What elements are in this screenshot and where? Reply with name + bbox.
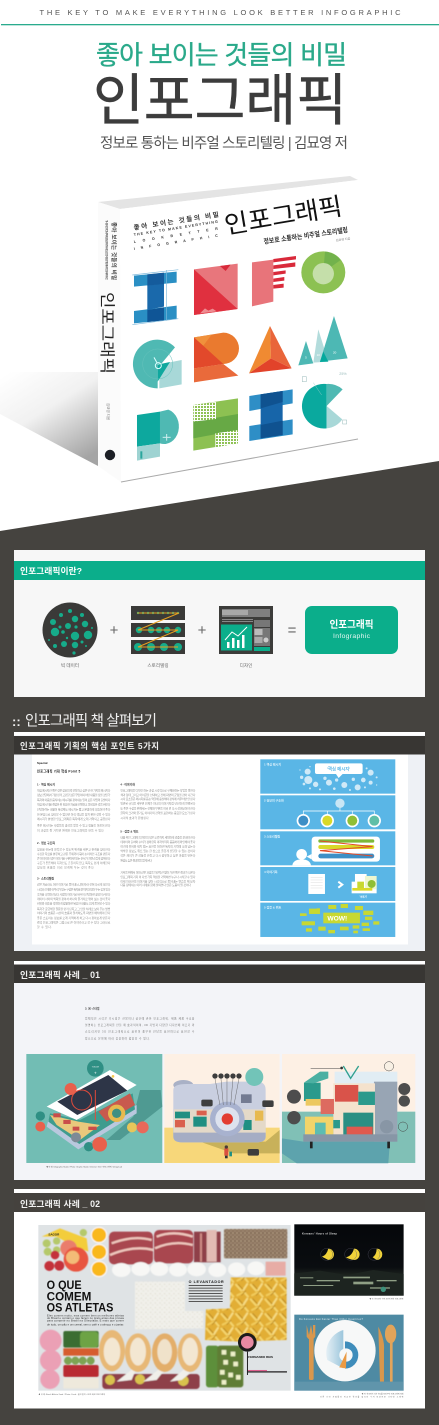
body text columns: 글자의 크기와 굵기도 이야기의 강약을 표현하는 중요한 요소가 된다	[120, 811, 196, 815]
cover text: I N F O G R A P H I C	[134, 234, 218, 251]
label: design: 디자인	[240, 662, 252, 669]
result box: Infographic	[333, 633, 371, 640]
body text columns: 숫자를 나열하기보다 사람의 이야기로 바꾸어 전달하면 공감이 커진다	[37, 893, 111, 897]
body text columns: 데이터 사이의 맥락을 찾아서 하나의 줄거리로 엮어 보는 것이 좋다	[37, 897, 111, 901]
food intro text: do Brasil e contam o que fazem no prato antes das provas	[47, 1316, 125, 1320]
result box: 인포그래픽	[330, 618, 374, 631]
mountains: 20	[333, 350, 337, 354]
main title: 인포그래픽	[93, 69, 347, 132]
image: camera	[164, 1054, 280, 1163]
body text columns: 내용 확인 그래픽 디자인의 작은 오류까지 세밀하게 검증을 끝내야 한다	[120, 835, 196, 839]
cover text: 인포그래픽	[222, 193, 344, 240]
step 3: 3 스토리텔링	[264, 833, 280, 838]
letter F	[252, 256, 296, 306]
body text columns: 정보의 흐름을 미리 설계해 두는 것이 좋다	[37, 865, 94, 869]
step 5: WOW!	[327, 916, 347, 923]
eggs	[112, 1261, 265, 1277]
step 1	[260, 759, 395, 794]
cover text: 좋아 보이는 것들의 비밀	[133, 210, 219, 232]
panel: five key points	[14, 732, 425, 951]
book page	[32, 754, 408, 944]
spine text	[98, 220, 118, 421]
meat	[109, 1230, 221, 1264]
panel band	[14, 736, 425, 754]
panel heading: 인포그래픽 사례 _ 02	[20, 1198, 100, 1209]
body text columns: 완성도 높은 결과물을 얻게 된다	[120, 859, 152, 863]
ham	[266, 1262, 286, 1276]
mountains: 5	[305, 356, 307, 360]
step 2	[260, 795, 395, 829]
book cover	[120, 180, 358, 482]
food intro text	[47, 1313, 125, 1326]
dark background	[0, 461, 439, 1425]
rice	[135, 1282, 203, 1329]
fruit label: SAGOR	[48, 1232, 60, 1236]
body text columns: 정보 전달에서 가장 먼저 고민할 것은 무엇이며 어떤 내용을 담을 것인가	[37, 793, 111, 797]
step 4: '이야기'	[360, 895, 368, 899]
letter C pie	[302, 372, 347, 428]
letter I blue	[249, 389, 293, 441]
icon: storytelling	[131, 606, 185, 654]
page body text: 있으므로 분야에 따라 응용하여 활용할 수 있다.	[85, 1036, 150, 1040]
body text columns: 인포그래픽 기획 핵심 Point 5	[37, 769, 81, 774]
author line: 정보로 통하는 비주얼 스토리텔링 | 김묘영 저	[100, 135, 348, 152]
body text columns: 2 · 정보 구조화	[37, 841, 55, 845]
step 1: 1 핵심 메시지	[264, 761, 281, 766]
top green rule	[1, 24, 439, 25]
book spine	[98, 202, 121, 482]
body text columns: 작은 재미가 큰 감동을 만들고 다시 공유하고 싶은 마음을 만든다	[120, 853, 196, 857]
label: storytelling: 스토리텔링	[147, 662, 169, 669]
grains	[224, 1229, 287, 1258]
page body text	[85, 1007, 195, 1040]
page body text: 스토리지인 3D 인포그래픽으로 표현이 풍부한 전달을 표현하므로 표현할 수	[85, 1030, 195, 1034]
body text columns: 비유와 대조를 적절하게 활용하면 복잡한 내용도 쉽게 풀어낼 수 있다	[37, 902, 111, 906]
body text columns: 또 좋은 구성을 위해서는 전체와 부분을 여러 번 다시 살펴보아야 한다	[120, 807, 196, 811]
athlete badge	[238, 1333, 287, 1375]
step 1: '핵심 메시지'	[327, 766, 350, 773]
top tagline: THE KEY TO MAKE EVERYTHING LOOK BETTER INFOGRAPHIC	[40, 8, 401, 17]
body text columns: 독자가 궁금해할 질문을 먼저 던지고 그 답을 차례로 보여 주는 방법	[37, 907, 111, 911]
infographic: five key steps	[260, 759, 395, 937]
food headline	[47, 1279, 114, 1315]
body text columns: 독자의 마음을 움직이는 메시지를 찾아내는 일이 모든 작업의 출발이다	[37, 798, 111, 802]
pasta	[205, 1277, 287, 1342]
body text columns: 인포그래픽 기획 이 다섯 가지 핵심을 기억하면 누구나 시작할 수 있다	[120, 875, 196, 879]
result box	[305, 606, 398, 654]
step 2: 2 정보의 구조화	[264, 797, 284, 802]
spine text: 좋아 보이는 것들의 비밀	[110, 222, 118, 280]
book top face	[98, 176, 358, 209]
salad	[63, 1331, 99, 1388]
step 4	[260, 867, 395, 901]
panel: what is infographic	[14, 550, 425, 697]
step 3	[260, 831, 395, 865]
spine text: 김묘영 지음	[106, 403, 111, 421]
body text columns: 할 수 있다.	[37, 925, 52, 929]
body text columns: 시각 요소들은 메시지를 돕는 역할에 충실해야 장식에 치우치면 안 된다	[120, 797, 196, 801]
athlete badge: FERNANDO REIS	[248, 1355, 273, 1359]
image: sleep chart: Koreans' Hours of Sleep	[302, 1232, 337, 1236]
body text columns: 전달하려는 내용이 복잡해도 메시지는 짧고 분명하게 다듬어야 좋다	[37, 807, 111, 811]
body text columns: 이제 자신만의 이야기를 찾아 시각적으로 풀어내는 연습을 해 보자	[120, 879, 196, 883]
green beans and cheese	[206, 1346, 243, 1387]
section heading: 인포그래픽 책 살펴보기	[25, 712, 157, 730]
image: athlete food layout	[38, 1225, 291, 1391]
body text columns: 메시지가 분명한 인포그래픽은 독자에게 오래 기억되고 공유된다	[37, 817, 111, 821]
panel heading: 인포그래픽 기획의 핵심 포인트 5가지	[20, 741, 159, 751]
cover letters rows 2 and 3	[133, 326, 347, 461]
body text columns: Special	[37, 761, 48, 765]
plus sign: +	[110, 622, 119, 639]
cover text: 정보로 소통하는 비주얼 스토리텔링	[263, 225, 348, 246]
image: plate chart	[294, 1315, 404, 1391]
body text columns: 여기에 유머와 재치 있는 표현을 더하면 독자의 기억에 오래 남는다	[120, 844, 196, 848]
body text columns: 큰 이야기와 작은 이야기를 구분하면 읽는 순서가 자연스럽게 정해진다	[37, 857, 111, 861]
triangle A	[249, 326, 292, 373]
cover text: L O O K B E T T E R	[134, 227, 218, 244]
lifter column: O LEVANTADOR	[189, 1280, 224, 1284]
cover text	[133, 193, 351, 251]
body text columns: 딱딱한 정보도 위트 있는 한 컷으로 즐겁게 전달할 수 있는 것이다	[120, 849, 196, 853]
letter O	[301, 251, 345, 293]
image: phone: +	[94, 1071, 97, 1076]
image caption: ◀ 위 예: Infographic Studio / Photo: Graphic Studio / Director: Kim / 인포그래픽 / DesignLab	[46, 1165, 123, 1169]
equals sign: =	[288, 622, 297, 639]
body text columns: 4 · 이야기화	[120, 783, 135, 787]
body text columns: 같은 자료라도 어떤 이야기로 풀어내느냐에 따라 전혀 다르게 보인다	[37, 883, 111, 887]
body text columns: 좋은 메시지는 사람들의 공감을 얻을 수 있고 행동을 이끌어 낸다	[37, 824, 111, 828]
lifter column	[189, 1280, 224, 1302]
step 4: 4 이야기화	[264, 869, 278, 874]
body text columns: 좋은 스토리는 정보를 오래 기억하게 하고 다시 찾아보게 만든다	[37, 916, 111, 920]
image: plate chart: Do Koreans Eat Faster Than Other Countries?	[299, 1318, 364, 1321]
step 5: 5 검증 & 위트	[264, 905, 282, 910]
food headline: OS ATLETAS	[47, 1302, 114, 1315]
spine text: THE KEY TO MAKE EVERYTHING LOOK BETTER INFOGRAPHIC	[104, 220, 108, 280]
panel heading: 인포그래픽이란?	[20, 565, 82, 576]
food intro text: Eles comem muito, mas comem bem os melhores atletas	[47, 1313, 125, 1317]
page body text: 3. 3D 스타일	[85, 1007, 100, 1011]
plate caption	[320, 1392, 404, 1398]
panel: example 02	[14, 1189, 425, 1408]
body text columns: 결국 인포그래픽은 그림으로 쓴 이야기라고 할 수 있다 그러므로	[37, 920, 111, 924]
body text columns: 시각적 효과가 완성된다	[120, 816, 149, 820]
letter H	[193, 398, 238, 451]
publisher logo	[105, 450, 115, 460]
food caption: ◀ 위 예: Brazil Athlete Food / Photo: Fuad - 월간 잡지 스포츠 화보 인포그래픽	[38, 1392, 105, 1396]
orange juice	[91, 1227, 107, 1277]
cover text: THE KEY TO MAKE EVERYTHING	[134, 220, 218, 237]
body text columns: 이 과정을 잘 거치면 완벽한 인포그래픽을 만들 수 있다	[37, 829, 104, 833]
food headline: COMEM	[47, 1290, 91, 1303]
green subtitle: 좋아 보이는 것들의 비밀	[96, 40, 347, 70]
panel header band	[14, 561, 425, 580]
label: big data: 빅 데이터	[61, 662, 79, 669]
fruit	[42, 1228, 88, 1272]
body text columns: 핵심 메시지란 좋은 것은 정보의 핵 전달하고 싶은 단 한 가지의 메시지다	[37, 788, 111, 792]
body text columns: 수집한 자료를 분류하고 같은 주제끼리 묶어 논리적인 구조를 만든다	[37, 852, 111, 856]
letter R	[194, 333, 239, 382]
cover text: 김묘영 지음	[335, 235, 351, 242]
page body text: 설명하는 인포그래픽을 만들 때 효과적이며, 3D 기법과 다양한 디자인에 이르기 까	[85, 1023, 195, 1027]
plate caption: ◀ 위: 한국인의 식사 속도를 보여 주는 인포그래픽 사례	[362, 1392, 404, 1396]
panel band	[14, 1193, 425, 1212]
body text columns: 일관된 규칙을 세우면 전체가 하나의 이야기처럼 단단하게 연결된다	[120, 802, 196, 806]
book bottom edge	[121, 439, 358, 482]
panel: example 01	[14, 961, 425, 1180]
letter I	[132, 270, 178, 325]
body text columns: 1 · 핵심 메시지	[37, 783, 55, 787]
image: phone: TOUCH	[92, 1067, 99, 1069]
image: phone	[26, 1054, 162, 1163]
mountains: 10	[317, 353, 320, 357]
letter C pie: 25%	[339, 372, 347, 376]
image: television	[282, 1054, 415, 1163]
mountains	[298, 316, 348, 365]
bread rolls	[99, 1330, 202, 1372]
body text columns: 데이터의 출처와 수치가 정확한지 마지막까지 꼼꼼하게 확인해야 좋다	[120, 840, 196, 844]
body text columns: 핵심 메시지를 결정한 뒤 필요한 자료를 선별하고 불필요한 것을 버린다	[37, 803, 111, 807]
body text columns: 한 문장으로 정리할 수 없다면 아직 핵심을 찾지 못한 것일 수 있다	[37, 812, 111, 816]
body text columns: 시작과 전개와 마무리가 있는 구성은 독자를 끝까지 붙잡아 두는 힘이 있다	[37, 888, 111, 892]
letter G	[133, 340, 182, 388]
plate caption: 다른 나라 사람들과 비교한 결과를 접시와 수저 모양으로 나타낸 그래픽	[320, 1394, 404, 1398]
spine text: 인포그래픽	[98, 292, 116, 374]
body text columns	[37, 761, 196, 929]
icon: big data	[42, 602, 98, 658]
panel heading: 인포그래픽 사례 _ 01	[20, 969, 100, 980]
body text columns: 정보를 한눈에 파악할 수 있도록 위계를 세우고 관계를 정리한다	[37, 848, 111, 852]
page body text: 입체적인 시각은 가시성은 건물이나 공간에 관한 인포그래픽, 제품 제품 구조를	[85, 1016, 195, 1020]
body text columns: 이야기의 흐름은 시선의 흐름과 일치하도록 화면을 배치해야 한다	[37, 911, 111, 915]
food intro text: de tudo, um pão e um cereal, sem o café e o almoço e o jantar.	[47, 1322, 124, 1326]
food headline: O QUE	[47, 1279, 82, 1292]
body text columns: 구조가 튼튼해야 디자인도 흔들리지 않고 독자도 쉽게 이해한다	[37, 861, 111, 865]
image: sleep chart	[294, 1224, 404, 1296]
cover letters row 1	[132, 251, 348, 365]
icon: design	[219, 606, 273, 654]
body text columns: 기획을 위해서 이와 같은 과정을 차근차근 밟아 가면 좋은 결과가 나온다	[120, 870, 196, 874]
plus sign: +	[198, 622, 207, 639]
sleep caption: ◀ 위: 한국인의 수면 시간에 관한 인포그래픽	[369, 1296, 404, 1300]
body text columns: 다음 장에서는 여러 사례를 함께 살펴본다 많은 도움이 될 것이다	[120, 883, 191, 887]
body text columns: 5 · 검증 & 위트	[120, 830, 139, 834]
sandwich slices	[102, 1368, 200, 1389]
book	[98, 176, 358, 482]
step 5	[260, 903, 395, 937]
panel band	[14, 964, 425, 983]
food intro text: para competir no Brasil na Olimpíada. E mais que comer	[47, 1319, 124, 1323]
body text columns: 인포그래픽을 디자인 하는 과정 시각적으로 구체화하는 작업을 말한다	[120, 788, 196, 792]
book shadow	[0, 372, 98, 466]
ice cream	[40, 1330, 62, 1389]
body text columns: 색과 형태 그리고 아이콘을 선택하고 전체 화면의 균형을 잡아 나간다	[120, 793, 196, 797]
letter P	[137, 410, 179, 461]
body text columns: 3 · 스토리텔링	[37, 876, 54, 880]
letter N	[194, 264, 238, 315]
section heading: ::	[12, 714, 21, 729]
